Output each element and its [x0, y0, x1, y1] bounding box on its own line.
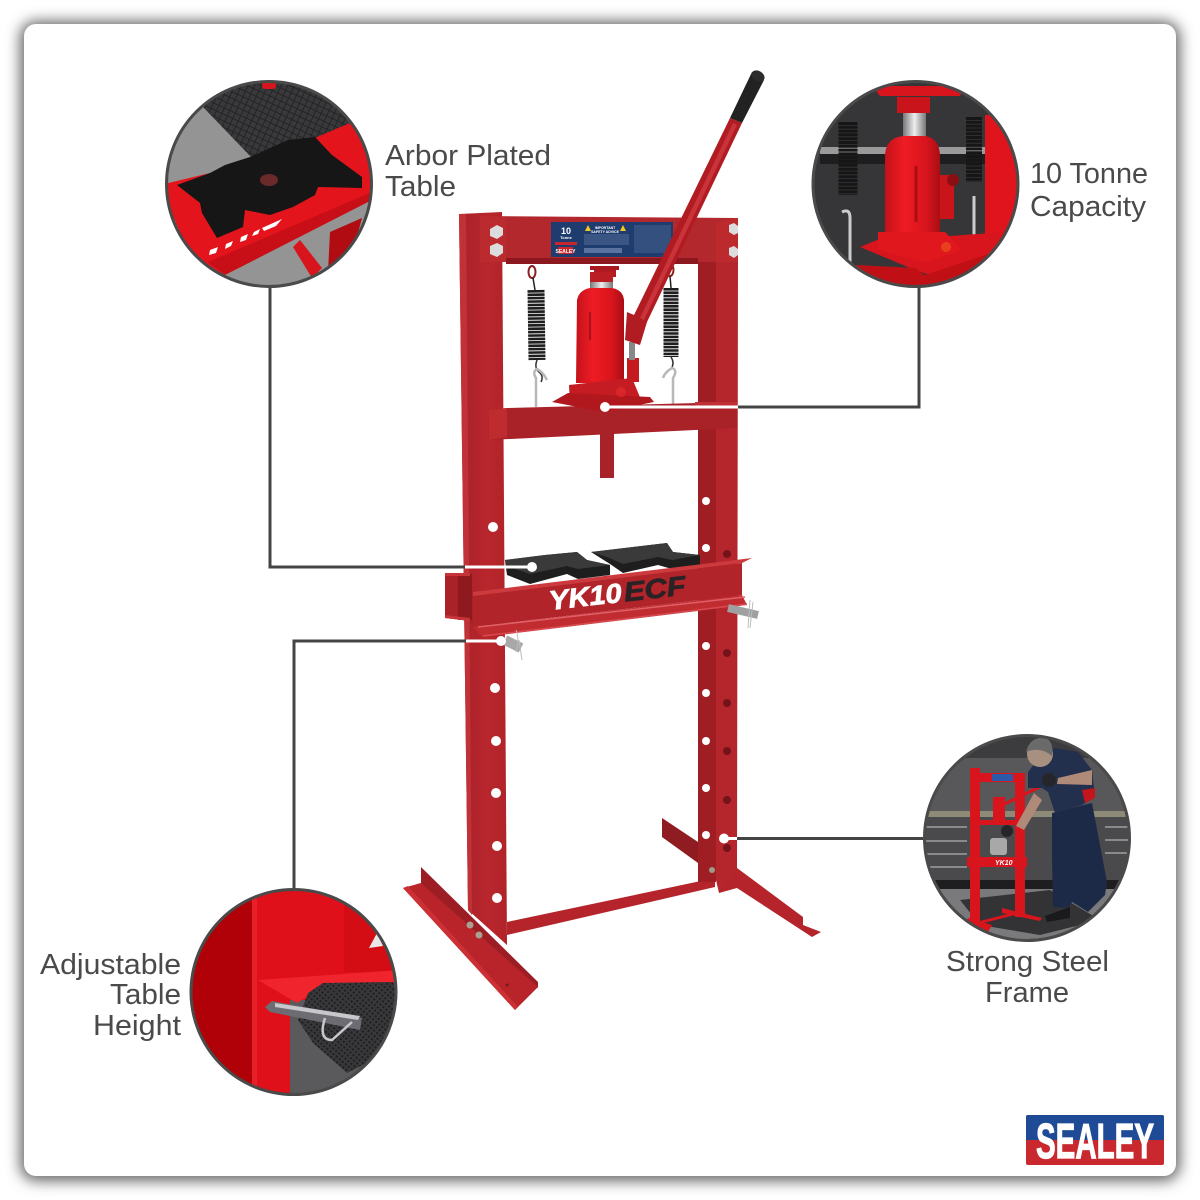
connector: arbor plated table: [270, 288, 537, 572]
safety label plate: SEALEY: [555, 249, 576, 255]
safety label plate: [551, 222, 673, 257]
label: adjustable table height: [40, 949, 181, 1042]
middle crossbeam with ram: [489, 402, 737, 478]
model name: YK10: [547, 578, 623, 616]
safety label plate: 10: [561, 226, 571, 236]
connector: 10 tonne capacity: [600, 288, 919, 412]
springs: [528, 264, 675, 407]
label: 10 tonne capacity: 10 Tonne: [1030, 158, 1148, 190]
connector: strong steel frame: [719, 834, 925, 844]
table beam: [473, 558, 752, 637]
label: strong steel frame: Strong Steel: [946, 946, 1109, 978]
circle photo: arbor plate: [165, 80, 373, 288]
label: adjustable table height: Table: [110, 979, 181, 1011]
safety label plate: IMPORTANT: [595, 226, 616, 230]
table pads: [505, 543, 700, 584]
label: strong steel frame: [946, 946, 1109, 1009]
label: arbor plated table: [385, 140, 551, 203]
label: strong steel frame: Frame: [985, 977, 1069, 1009]
circle photo: bottle jack: [812, 80, 1020, 288]
left foot: [403, 867, 538, 1010]
bottle jack: [552, 266, 654, 412]
top beam: [480, 216, 738, 264]
safety label plate: Tonne: [560, 235, 573, 240]
right foot front: [719, 868, 821, 937]
label: adjustable table height: Height: [93, 1010, 181, 1042]
product: hydraulic press: [403, 68, 821, 1010]
circle photo: adjustable pin: [190, 888, 398, 1096]
right foot rear flange: [662, 818, 698, 863]
handle: [625, 68, 767, 345]
technician: [1052, 803, 1107, 912]
mini press: [966, 768, 1042, 932]
table beam: ECF: [622, 570, 689, 607]
label: arbor plated table: Arbor Plated: [385, 140, 551, 172]
table channel end and rear: [445, 573, 473, 627]
safety label plate: SAFETY ADVICE: [591, 230, 620, 234]
label: 10 tonne capacity: Capacity: [1030, 191, 1147, 223]
label: arbor plated table: Table: [385, 171, 456, 203]
connector: adjustable table height: [294, 636, 506, 889]
label: 10 tonne capacity: [1030, 158, 1148, 223]
label: adjustable table height: Adjustable: [40, 949, 181, 981]
circle photo: workshop use: [920, 730, 1135, 945]
left column: [459, 212, 507, 945]
right column: [698, 262, 738, 893]
bottom crossbar: [507, 878, 715, 935]
pins: [505, 600, 758, 660]
circle photo: workshop use: YK10: [995, 860, 1013, 867]
